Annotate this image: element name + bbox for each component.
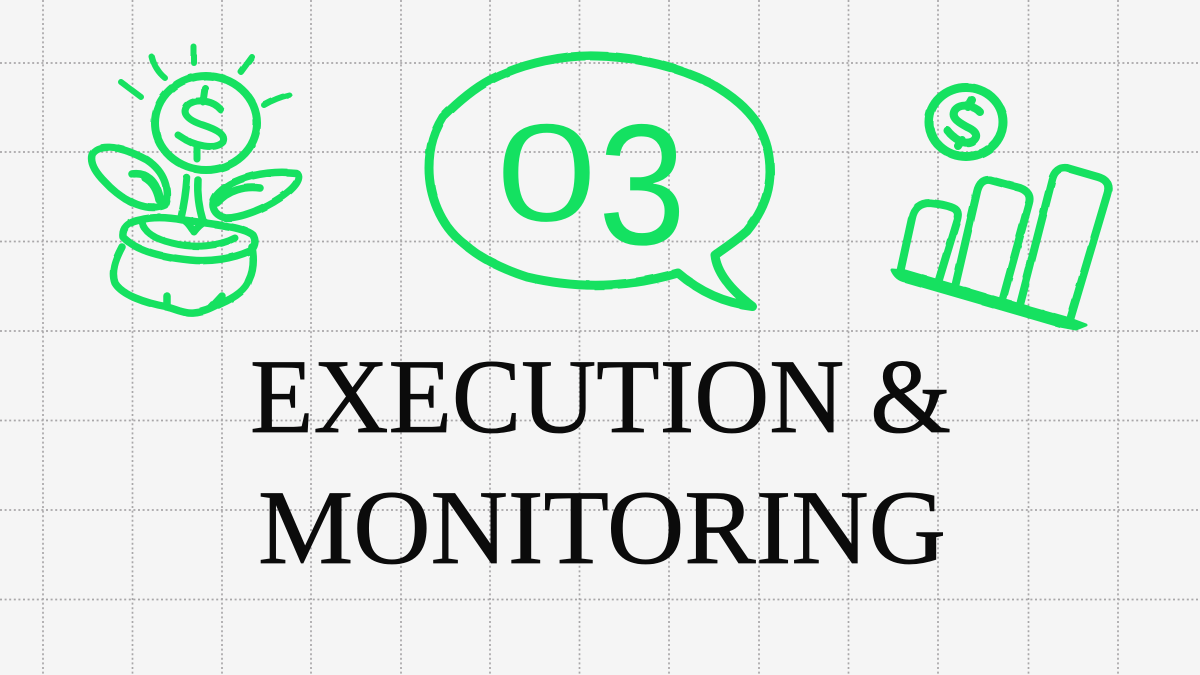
icon: money plant in pot bbox=[92, 47, 299, 313]
title line 2: MONITORING bbox=[258, 469, 946, 586]
tall bar bbox=[1020, 168, 1108, 320]
medium bar bbox=[955, 180, 1030, 302]
plant rays bbox=[121, 47, 289, 105]
section number 03: 0 bbox=[496, 94, 597, 251]
chart coin dollar sign bbox=[947, 100, 980, 146]
plant stem bbox=[181, 178, 203, 221]
pot rim inner bbox=[142, 222, 235, 246]
chart baseline bbox=[892, 270, 1086, 329]
icon: bar chart with coin bbox=[892, 88, 1108, 329]
small bar bbox=[900, 203, 958, 283]
pot body bbox=[113, 247, 253, 313]
speech bubble bbox=[429, 56, 770, 306]
title bbox=[250, 338, 951, 586]
title line 1: EXECUTION & bbox=[250, 338, 951, 455]
plant coin bbox=[155, 76, 257, 170]
right leaf bbox=[213, 172, 299, 218]
pot rim bbox=[123, 218, 255, 261]
section number 03: 3 bbox=[598, 89, 686, 281]
chart coin bbox=[929, 88, 1003, 156]
section number 03 bbox=[496, 89, 686, 281]
plant coin dollar sign bbox=[178, 88, 224, 159]
left leaf bbox=[92, 147, 167, 207]
